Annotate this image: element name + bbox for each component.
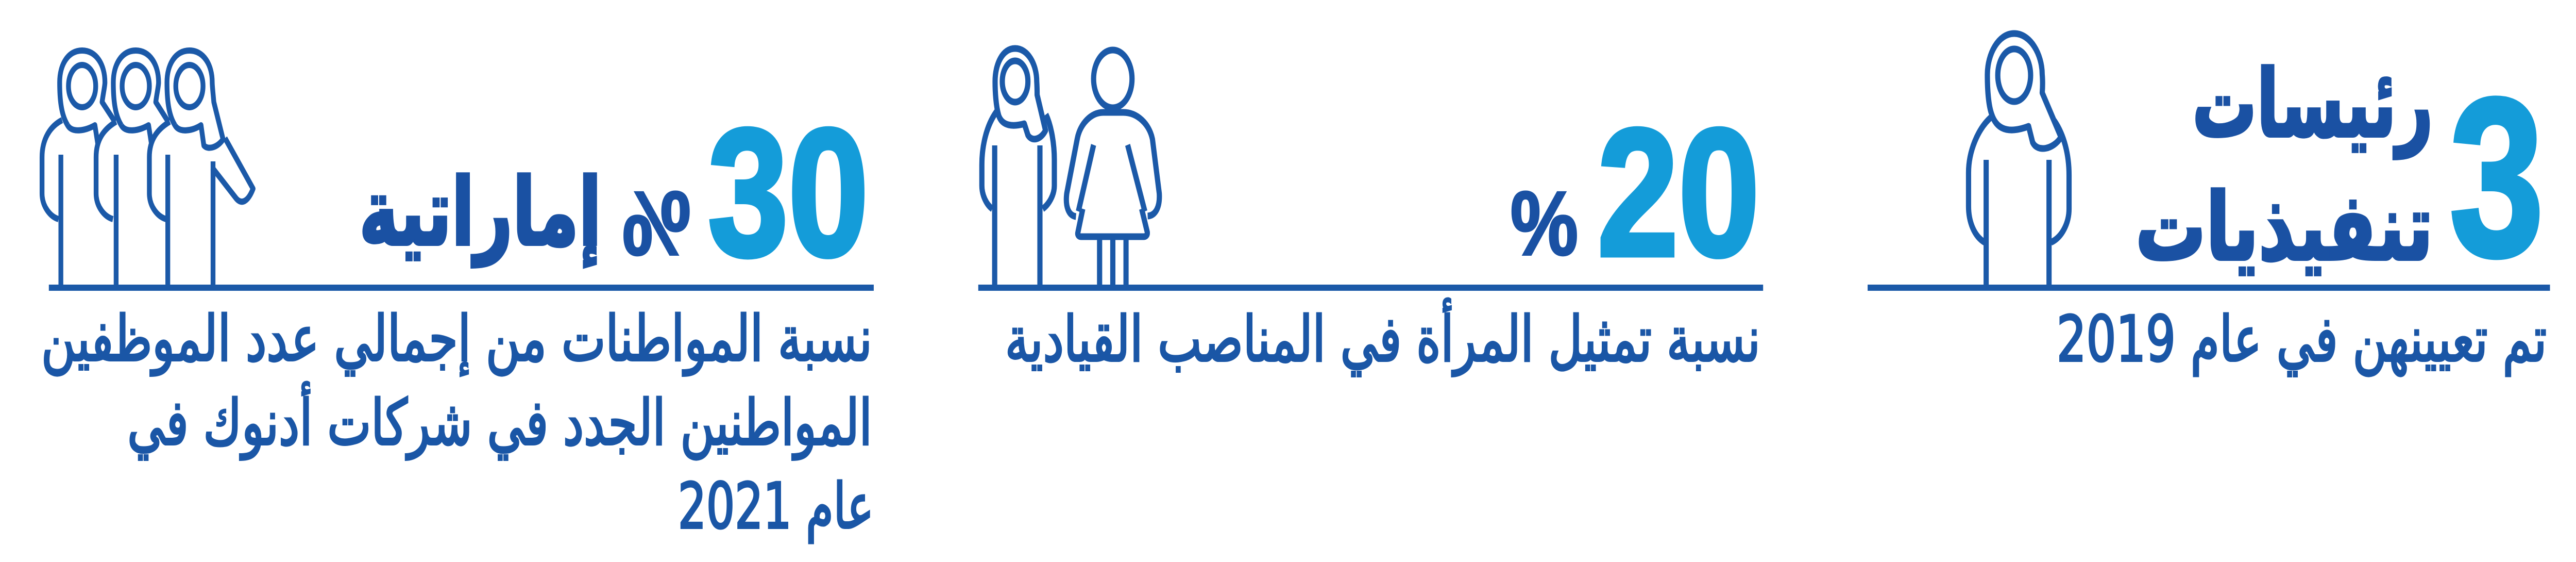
icon: woman in hijab — [1969, 34, 2069, 285]
description text: المواطنين الجدد في شركات أدنوك في — [127, 382, 872, 460]
description text: عام 2021 — [678, 470, 874, 543]
percent sign: % — [1511, 173, 1578, 274]
heading: executive: رئيسات — [2192, 51, 2433, 159]
description text — [41, 302, 874, 543]
panel: thirty percent emirati — [41, 51, 874, 543]
heading number: 3: 3 — [2449, 52, 2544, 303]
icon: woman in hijab and woman in dress — [982, 48, 1159, 285]
heading: emirati: إماراتية — [359, 159, 601, 268]
icon: three women in hijab — [42, 51, 253, 285]
heading number: 20: 20 — [1597, 91, 1759, 294]
description text: نسبة تمثيل المرأة في المناصب القيادية — [1005, 298, 1760, 376]
divider line — [1868, 285, 2550, 291]
percent sign mirrored: % — [622, 173, 691, 274]
heading: leaders: تنفيذيات — [2136, 174, 2433, 282]
description text: نسبة المواطنات من إجمالي عدد الموظفين — [41, 302, 872, 376]
divider line — [978, 285, 1763, 291]
description text: تم تعيينهن في عام 2019 — [2057, 303, 2547, 376]
heading number: 30: 30 — [708, 91, 869, 294]
divider line — [49, 285, 874, 291]
panel: three executive women — [1868, 34, 2550, 376]
panel: twenty percent representation — [978, 48, 1763, 376]
